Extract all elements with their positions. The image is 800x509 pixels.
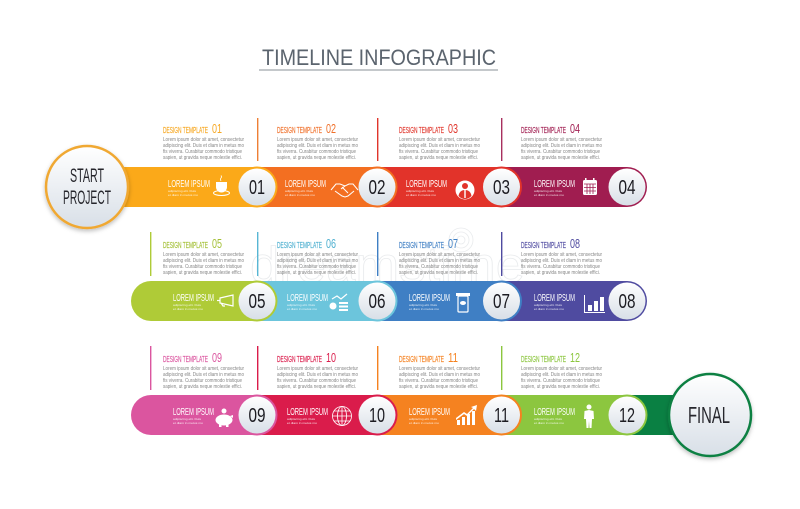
bar label 07: et diam in metus mo xyxy=(409,307,439,311)
text block 08: sapien, ut gravida neque molestie effici. xyxy=(521,270,600,276)
bar label 04: LOREM IPSUM xyxy=(534,178,575,190)
bar label 02: LOREM IPSUM xyxy=(285,178,326,190)
text block 11: fis viverra. Curabitur commodo tristique xyxy=(399,378,478,384)
bar label 09: adipiscing elit. Duis xyxy=(173,417,202,421)
text block 02: DESIGN TEMPLATE xyxy=(277,125,322,135)
text block 02 xyxy=(277,121,358,161)
text block 11: adipiscing elit. Duis et diam in metus mo xyxy=(399,372,480,378)
text block 07: 07 xyxy=(448,236,458,251)
text block 10: sapien, ut gravida neque molestie effici. xyxy=(277,384,356,390)
text block 03: fis viverra. Curabitur commodo tristique xyxy=(399,149,478,155)
icon: calendar xyxy=(583,178,597,195)
bar label 12: LOREM IPSUM xyxy=(534,406,575,418)
text block 06 xyxy=(277,236,358,276)
text block 05: fis viverra. Curabitur commodo tristique xyxy=(163,264,242,270)
icon: handshake xyxy=(331,184,358,197)
text block 12: sapien, ut gravida neque molestie effici. xyxy=(521,384,600,390)
text block 11: Lorem ipsum dolor sit amet, consectetur xyxy=(399,366,480,372)
text block 11: DESIGN TEMPLATE xyxy=(399,354,444,364)
text block 08: fis viverra. Curabitur commodo tristique xyxy=(521,264,600,270)
bar label 08: et diam in metus mo xyxy=(534,307,564,311)
text block 09: fis viverra. Curabitur commodo tristique xyxy=(163,378,242,384)
bar label 07 xyxy=(409,292,450,311)
timeline bar row 2 xyxy=(131,280,647,322)
text block 03 xyxy=(399,121,480,161)
number badge 12 xyxy=(608,396,646,434)
text block 04: DESIGN TEMPLATE xyxy=(521,125,566,135)
text block 01: sapien, ut gravida neque molestie effici. xyxy=(163,155,242,161)
text block 02: adipiscing elit. Duis et diam in metus mo xyxy=(277,143,358,149)
bar label 10: LOREM IPSUM xyxy=(287,406,328,418)
bar label 11 xyxy=(409,406,450,425)
bar label 08 xyxy=(534,292,575,311)
bar label 06 xyxy=(287,292,328,311)
text block 05: 05 xyxy=(212,236,222,251)
text block 05: sapien, ut gravida neque molestie effici. xyxy=(163,270,242,276)
number badge 07: 07 xyxy=(493,291,510,313)
icon: document with eye xyxy=(456,293,470,312)
text block 08: 08 xyxy=(570,236,580,251)
bar label 09 xyxy=(173,406,214,425)
number badge 09: 09 xyxy=(248,405,266,427)
bar label 03: LOREM IPSUM xyxy=(406,178,447,190)
bar label 06: adipiscing elit. Duis xyxy=(287,303,316,307)
bar label 07: adipiscing elit. Duis xyxy=(409,303,438,307)
text block 03: 03 xyxy=(448,121,458,136)
text block 07: adipiscing elit. Duis et diam in metus mo xyxy=(399,258,480,264)
bar label 10 xyxy=(287,406,328,425)
timeline bar row 3 xyxy=(131,394,700,436)
text block 03: sapien, ut gravida neque molestie effici. xyxy=(399,155,478,161)
bar label 01 xyxy=(168,178,210,197)
icon: coffee cup xyxy=(214,176,230,196)
text block 05: adipiscing elit. Duis et diam in metus mo xyxy=(163,258,244,264)
start project circle: START xyxy=(70,166,104,187)
bar label 12: et diam in metus mo xyxy=(534,421,564,425)
text block 07: fis viverra. Curabitur commodo tristique xyxy=(399,264,478,270)
number badge 03 xyxy=(483,168,520,206)
bar label 11: et diam in metus mo xyxy=(409,421,439,425)
text block 04: Lorem ipsum dolor sit amet, consectetur xyxy=(521,137,602,143)
text block 01: 01 xyxy=(212,121,222,136)
bar label 12: adipiscing elit. Duis xyxy=(534,417,563,421)
text block 09 xyxy=(163,350,244,390)
number badge 06 xyxy=(358,282,396,320)
bar label 02: adipiscing elit. Duis xyxy=(285,189,314,193)
bar label 04 xyxy=(534,178,575,197)
icon: megaphone xyxy=(217,295,233,306)
text block 05: Lorem ipsum dolor sit amet, consectetur xyxy=(163,252,244,258)
text block 05: DESIGN TEMPLATE xyxy=(163,240,208,250)
icon: piggy bank xyxy=(214,408,233,427)
text block 03: adipiscing elit. Duis et diam in metus mo xyxy=(399,143,480,149)
bar label 04: et diam in metus mo xyxy=(534,193,564,197)
start project circle: PROJECT xyxy=(63,188,111,209)
final circle xyxy=(669,374,751,456)
text block 02: 02 xyxy=(326,121,336,136)
number badge 08 xyxy=(608,282,646,320)
text block 08: Lorem ipsum dolor sit amet, consectetur xyxy=(521,252,602,258)
number badge 01 xyxy=(238,168,276,206)
bar label 10: adipiscing elit. Duis xyxy=(287,417,316,421)
number badge 02: 02 xyxy=(368,177,386,199)
text block 11 xyxy=(399,350,480,390)
text block 02: Lorem ipsum dolor sit amet, consectetur xyxy=(277,137,358,143)
bar label 02: et diam in metus mo xyxy=(285,193,315,197)
text block 12: fis viverra. Curabitur commodo tristique xyxy=(521,378,600,384)
number badge 12: 12 xyxy=(619,405,635,427)
text block 10: fis viverra. Curabitur commodo tristique xyxy=(277,378,356,384)
bar label 12 xyxy=(534,406,575,425)
text block 09: 09 xyxy=(212,350,222,365)
text block 11: 11 xyxy=(448,350,458,365)
timeline bar row 1 xyxy=(87,166,647,208)
bar label 07: LOREM IPSUM xyxy=(409,292,450,304)
bar label 01: LOREM IPSUM xyxy=(168,178,210,190)
bar label 04: adipiscing elit. Duis xyxy=(534,189,563,193)
number badge 07 xyxy=(483,282,520,320)
text block 01: DESIGN TEMPLATE xyxy=(163,125,208,135)
bar label 05: adipiscing elit. Duis xyxy=(173,303,202,307)
icon: businessman xyxy=(584,404,594,428)
text block 06: adipiscing elit. Duis et diam in metus mo xyxy=(277,258,358,264)
text block 06: sapien, ut gravida neque molestie effici. xyxy=(277,270,356,276)
text block 01: fis viverra. Curabitur commodo tristique xyxy=(163,149,242,155)
text block 08: DESIGN TEMPLATE xyxy=(521,240,566,250)
number badge 01: 01 xyxy=(249,177,265,199)
number badge 10: 10 xyxy=(369,405,385,427)
text block 12: adipiscing elit. Duis et diam in metus mo xyxy=(521,372,602,378)
text block 06: fis viverra. Curabitur commodo tristique xyxy=(277,264,356,270)
bar label 11: LOREM IPSUM xyxy=(409,406,450,418)
text block 07: sapien, ut gravida neque molestie effici. xyxy=(399,270,478,276)
text block 08 xyxy=(521,236,602,276)
start project circle xyxy=(46,146,128,228)
text block 04: adipiscing elit. Duis et diam in metus mo xyxy=(521,143,602,149)
text block 04: fis viverra. Curabitur commodo tristique xyxy=(521,149,600,155)
text block 06: Lorem ipsum dolor sit amet, consectetur xyxy=(277,252,358,258)
text block 09: sapien, ut gravida neque molestie effici. xyxy=(163,384,242,390)
text block 04: sapien, ut gravida neque molestie effici. xyxy=(521,155,600,161)
number badge 06: 06 xyxy=(368,291,386,313)
text block 03: DESIGN TEMPLATE xyxy=(399,125,444,135)
final circle: FINAL xyxy=(688,402,730,428)
number badge 09 xyxy=(238,396,276,434)
number badge 05: 05 xyxy=(248,291,266,313)
text block 04 xyxy=(521,121,602,161)
text block 01: adipiscing elit. Duis et diam in metus mo xyxy=(163,143,244,149)
bar label 03 xyxy=(406,178,447,197)
title: TIMELINE INFOGRAPHIC xyxy=(262,45,496,70)
text block 09: DESIGN TEMPLATE xyxy=(163,354,208,364)
text block 06: DESIGN TEMPLATE xyxy=(277,240,322,250)
bar label 01: et diam in metus mo xyxy=(168,193,198,197)
text block 05 xyxy=(163,236,244,276)
bar label 11: adipiscing elit. Duis xyxy=(409,417,438,421)
icon: businessman in circle xyxy=(456,180,474,200)
text block 02: fis viverra. Curabitur commodo tristique xyxy=(277,149,356,155)
icon: bar chart xyxy=(584,295,605,313)
text block 12 xyxy=(521,350,602,390)
bar label 01: adipiscing elit. Duis xyxy=(168,189,197,193)
text block 11: sapien, ut gravida neque molestie effici. xyxy=(399,384,478,390)
divider lines xyxy=(150,118,502,390)
bar label 08: LOREM IPSUM xyxy=(534,292,575,304)
bar label 06: LOREM IPSUM xyxy=(287,292,328,304)
text block 10: 10 xyxy=(326,350,336,365)
bar label 02 xyxy=(285,178,326,197)
bar label 08: adipiscing elit. Duis xyxy=(534,303,563,307)
bar label 06: et diam in metus mo xyxy=(287,307,317,311)
bar label 05 xyxy=(173,292,214,311)
text block 12: 12 xyxy=(570,350,580,365)
text block 09: Lorem ipsum dolor sit amet, consectetur xyxy=(163,366,244,372)
text block 07: Lorem ipsum dolor sit amet, consectetur xyxy=(399,252,480,258)
bar label 03: et diam in metus mo xyxy=(406,193,436,197)
watermark: dreamstime xyxy=(250,237,525,293)
text block 07 xyxy=(399,236,480,276)
text block 01: Lorem ipsum dolor sit amet, consectetur xyxy=(163,137,244,143)
text block 10: adipiscing elit. Duis et diam in metus mo xyxy=(277,372,358,378)
text block 10: DESIGN TEMPLATE xyxy=(277,354,322,364)
number badge 02 xyxy=(358,168,396,206)
bar label 05: LOREM IPSUM xyxy=(173,292,214,304)
icon: growth chart xyxy=(456,405,477,425)
text block 04: 04 xyxy=(570,121,580,136)
bar label 10: et diam in metus mo xyxy=(287,421,317,425)
bar label 05: et diam in metus mo xyxy=(173,307,203,311)
number badge 10 xyxy=(358,396,396,434)
text block 12: Lorem ipsum dolor sit amet, consectetur xyxy=(521,366,602,372)
number badge 11: 11 xyxy=(494,405,509,427)
text block 08: adipiscing elit. Duis et diam in metus mo xyxy=(521,258,602,264)
bar label 03: adipiscing elit. Duis xyxy=(406,189,435,193)
text block 06: 06 xyxy=(326,236,336,251)
text block 01 xyxy=(163,121,244,161)
number badge 04: 04 xyxy=(618,177,636,199)
text block 10 xyxy=(277,350,358,390)
text block 03: Lorem ipsum dolor sit amet, consectetur xyxy=(399,137,480,143)
text block 07: DESIGN TEMPLATE xyxy=(399,240,444,250)
number badge 05 xyxy=(238,282,276,320)
number badge 04 xyxy=(608,168,646,206)
text block 02: sapien, ut gravida neque molestie effici. xyxy=(277,155,356,161)
bar label 09: LOREM IPSUM xyxy=(173,406,214,418)
number badge 08: 08 xyxy=(618,291,636,313)
text block 10: Lorem ipsum dolor sit amet, consectetur xyxy=(277,366,358,372)
icon: globe xyxy=(332,406,352,426)
number badge 11 xyxy=(483,396,520,434)
text block 12: DESIGN TEMPLATE xyxy=(521,354,566,364)
text block 09: adipiscing elit. Duis et diam in metus mo xyxy=(163,372,244,378)
number badge 03: 03 xyxy=(493,177,510,199)
bar label 09: et diam in metus mo xyxy=(173,421,203,425)
icon: money growth xyxy=(330,294,348,311)
